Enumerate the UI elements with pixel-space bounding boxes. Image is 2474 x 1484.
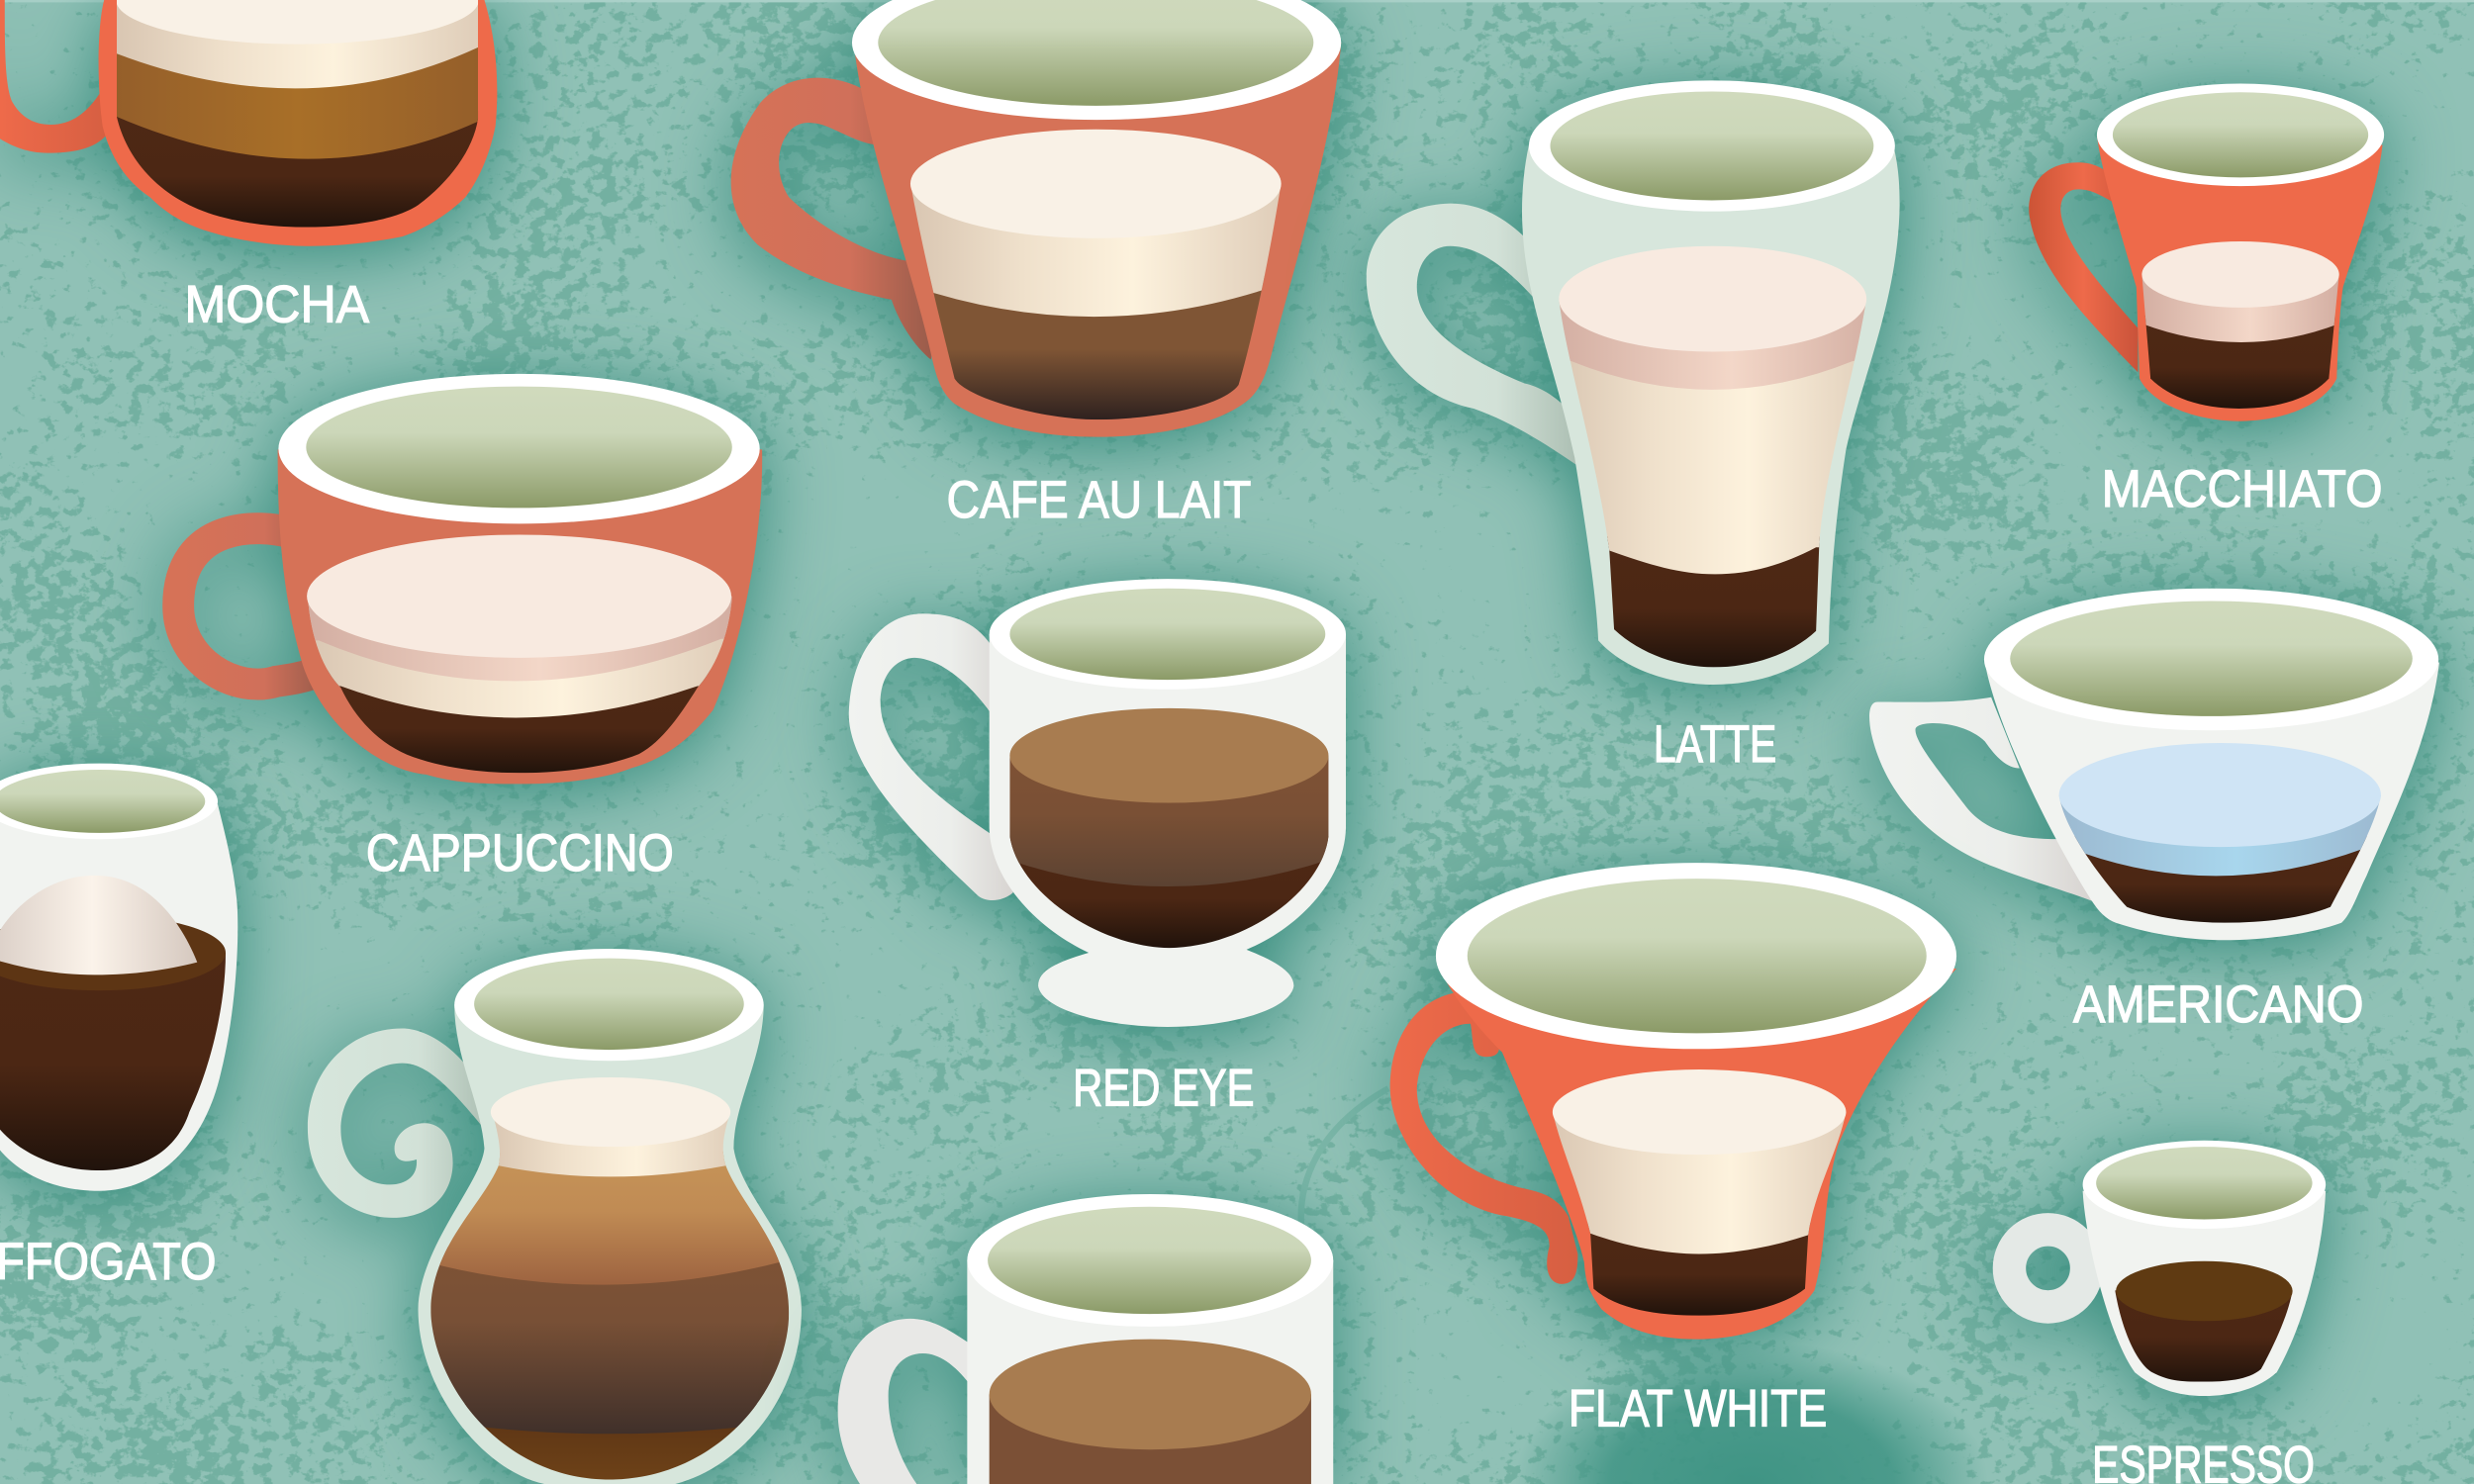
- rim: cappuccino: [278, 374, 760, 523]
- handle: espresso: [2009, 1230, 2087, 1307]
- foam top: pear glass: [491, 1077, 730, 1147]
- crema top: bottom mug: [990, 1340, 1311, 1449]
- cup: bottom mug: [838, 1194, 1333, 1484]
- body: macchiato: [2097, 136, 2383, 421]
- rim: cafe au lait: [852, 0, 1341, 120]
- body: affogato: [0, 801, 238, 1191]
- body: cappuccino: [278, 449, 762, 784]
- cup: mocha: [0, 0, 497, 246]
- cup: cafe au lait: [731, 0, 1341, 437]
- label: flat white: FLAT WHITE: [1569, 1379, 1827, 1438]
- cup: red eye: [849, 579, 1346, 1027]
- body: mocha: [99, 0, 497, 246]
- foam top: cafe au lait: [910, 130, 1282, 238]
- rim: espresso: [2083, 1141, 2326, 1229]
- foam top: macchiato: [2141, 241, 2339, 308]
- body: bottom mug: [967, 1260, 1333, 1484]
- handle: americano: [1869, 697, 2095, 902]
- cup: affogato: [0, 764, 238, 1191]
- handle: mocha: [0, 0, 107, 153]
- liquid layers: flat white: [1546, 1104, 1854, 1317]
- crema top: affogato: [0, 915, 226, 990]
- liquid layers: affogato: [0, 931, 237, 1173]
- inner: macchiato: [2113, 92, 2368, 177]
- cup: pear-shaped glass: [308, 949, 802, 1484]
- inner: cappuccino: [306, 387, 732, 508]
- handle: cappuccino: [178, 528, 334, 685]
- rim: bottom mug: [967, 1194, 1333, 1327]
- inner: red eye: [1009, 589, 1325, 680]
- foam top: latte: [1559, 246, 1866, 352]
- inner: cafe au lait: [878, 0, 1313, 106]
- rim: macchiato: [2097, 84, 2384, 186]
- liquid layers: americano: [2051, 788, 2390, 924]
- spiral handle: [308, 1029, 492, 1218]
- liquid layers: cafe au lait: [911, 188, 1281, 419]
- milk foam top: mocha: [116, 0, 479, 45]
- liquid layers: latte: [1554, 284, 1877, 669]
- liquid layers: cappuccino: [300, 584, 741, 776]
- body: red eye: [990, 634, 1346, 1027]
- body: latte: [1522, 145, 1900, 685]
- body: americano: [1985, 663, 2439, 940]
- foam top: cappuccino: [307, 534, 731, 658]
- cup: cappuccino: [178, 374, 762, 784]
- body: flat white: [1437, 966, 1956, 1340]
- inner: bottom mug: [988, 1207, 1311, 1314]
- handle: red eye: [849, 613, 1017, 900]
- label: cafe au lait: CAFE AU LAIT: [947, 471, 1251, 529]
- inner: americano: [2010, 601, 2413, 716]
- label: red eye: RED EYE: [1073, 1060, 1255, 1118]
- liquid layers: pear glass: [426, 1096, 797, 1483]
- crema top: espresso: [2116, 1261, 2293, 1321]
- inner: latte: [1550, 91, 1873, 200]
- rim: pear glass: [454, 949, 764, 1061]
- crema top: red eye: [1009, 708, 1328, 803]
- foam top: flat white: [1553, 1069, 1846, 1155]
- liquid layers: red eye: [1001, 741, 1336, 950]
- handle: bottom mug: [838, 1319, 971, 1484]
- body: pear glass: [419, 1005, 802, 1484]
- label: mocha: MOCHA: [185, 275, 369, 333]
- cup: espresso: [2009, 1141, 2326, 1396]
- label: americano: AMERICANO: [2073, 975, 2363, 1034]
- body: cafe au lait: [854, 43, 1341, 437]
- handle: latte: [1367, 204, 1584, 470]
- liquid layers: mocha: [111, 0, 489, 231]
- handle: cafe au lait: [731, 78, 947, 360]
- cup: americano: [1869, 589, 2439, 940]
- ice cream scoop: affogato: [0, 876, 197, 974]
- inner: flat white: [1468, 879, 1927, 1033]
- handle: macchiato: [2029, 162, 2138, 372]
- body: espresso: [2083, 1191, 2326, 1396]
- rim: latte: [1529, 80, 1895, 212]
- inner: affogato: [0, 770, 205, 833]
- cup: macchiato: [2029, 84, 2384, 421]
- cup: latte: [1367, 80, 1900, 685]
- inner: pear glass: [474, 959, 744, 1050]
- handle: flat white: [1390, 992, 1577, 1284]
- inner: espresso: [2096, 1147, 2313, 1219]
- rim: red eye: [990, 579, 1346, 690]
- liquid layers: macchiato: [2138, 268, 2343, 411]
- label: latte: LATTE: [1654, 715, 1776, 774]
- rim: flat white: [1436, 863, 1956, 1049]
- liquid: espresso: [2107, 1277, 2304, 1385]
- liquid: bottom mug: [990, 1394, 1311, 1484]
- label: cappuccino: CAPPUCCINO: [366, 824, 674, 882]
- rim: americano: [1984, 589, 2438, 730]
- cup: flat white: [1390, 863, 1956, 1340]
- label: macchiato: MACCHIATO: [2102, 460, 2383, 518]
- water top: americano: [2059, 743, 2381, 847]
- rim: affogato: [0, 764, 218, 839]
